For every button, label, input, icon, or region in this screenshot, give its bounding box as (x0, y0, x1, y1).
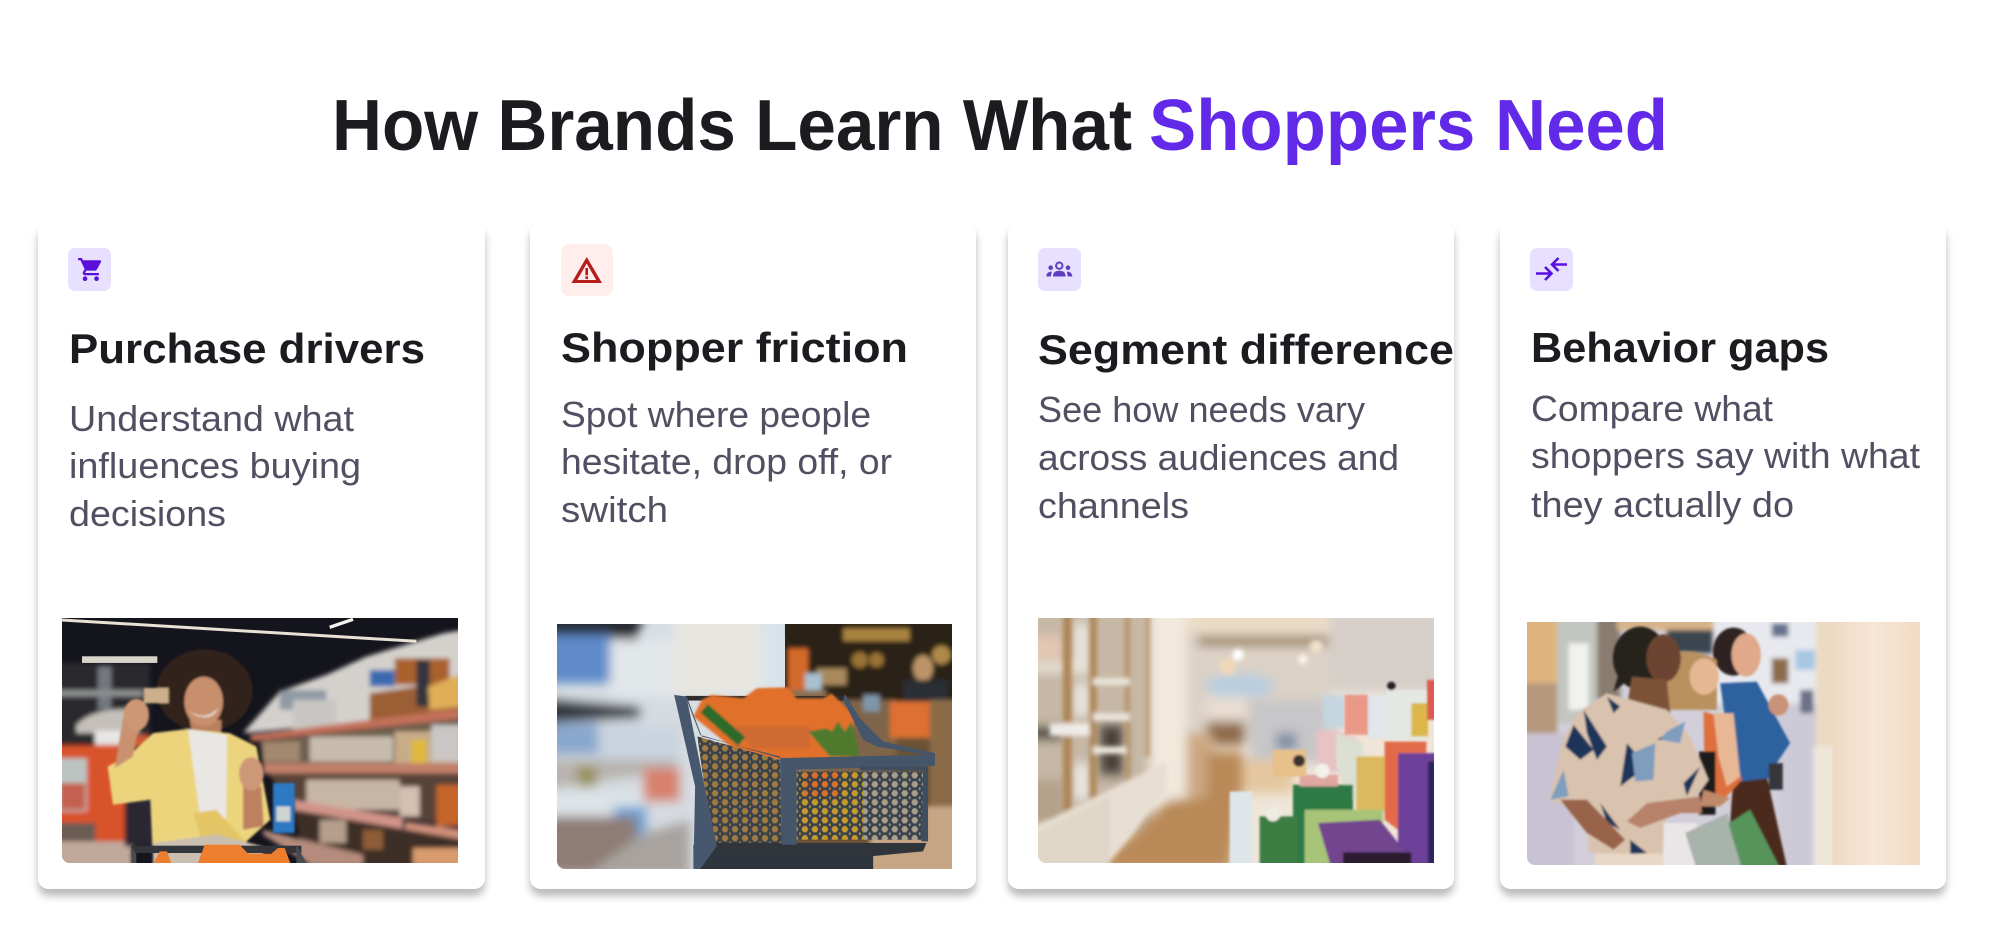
panel: segment difference (1008, 222, 1454, 889)
description: shopper friction: hesitate, drop off, or (561, 441, 892, 482)
description: segment difference (1038, 389, 1399, 526)
title: Shoppers Need (1149, 86, 1668, 166)
panel: behavior gaps (1500, 222, 1946, 889)
title (332, 86, 1668, 166)
heading: segment difference: Segment difference (1038, 326, 1454, 373)
icon: shopping cart (68, 248, 111, 291)
description: segment difference: See how needs vary (1038, 389, 1365, 430)
description: behavior gaps: Compare what (1531, 388, 1773, 429)
heading: shopper friction: Shopper friction (561, 324, 908, 371)
description: shopper friction (561, 394, 892, 530)
description: shopper friction: Spot where people (561, 394, 871, 435)
description: segment difference: across audiences and (1038, 437, 1399, 478)
photo: woman in supermarket aisle holding a card (56, 618, 463, 868)
heading: behavior gaps: Behavior gaps (1531, 324, 1829, 371)
icon: converging arrows (1530, 248, 1573, 291)
description: purchase drivers: Understand what (69, 398, 354, 439)
description: segment difference: channels (1038, 485, 1189, 526)
description: purchase drivers (69, 398, 361, 534)
description: behavior gaps: shoppers say with what (1531, 435, 1920, 476)
panel: shopper friction (530, 222, 976, 889)
description: behavior gaps: they actually do (1531, 484, 1794, 525)
heading: purchase drivers: Purchase drivers (69, 325, 425, 372)
icon: warning triangle (561, 244, 613, 296)
title: How Brands Learn What (332, 86, 1132, 166)
description: behavior gaps (1531, 388, 1920, 525)
photo: blurred boutique store aisle (1038, 618, 1434, 863)
description: shopper friction: switch (561, 489, 668, 530)
icon: audience groups (1038, 248, 1081, 291)
description: purchase drivers: decisions (69, 493, 226, 534)
photo: shopping basket in store aisle (557, 624, 952, 869)
photo: three women window shopping with bags (1517, 613, 1922, 870)
description: purchase drivers: influences buying (69, 445, 361, 486)
panel: purchase drivers (38, 222, 485, 889)
